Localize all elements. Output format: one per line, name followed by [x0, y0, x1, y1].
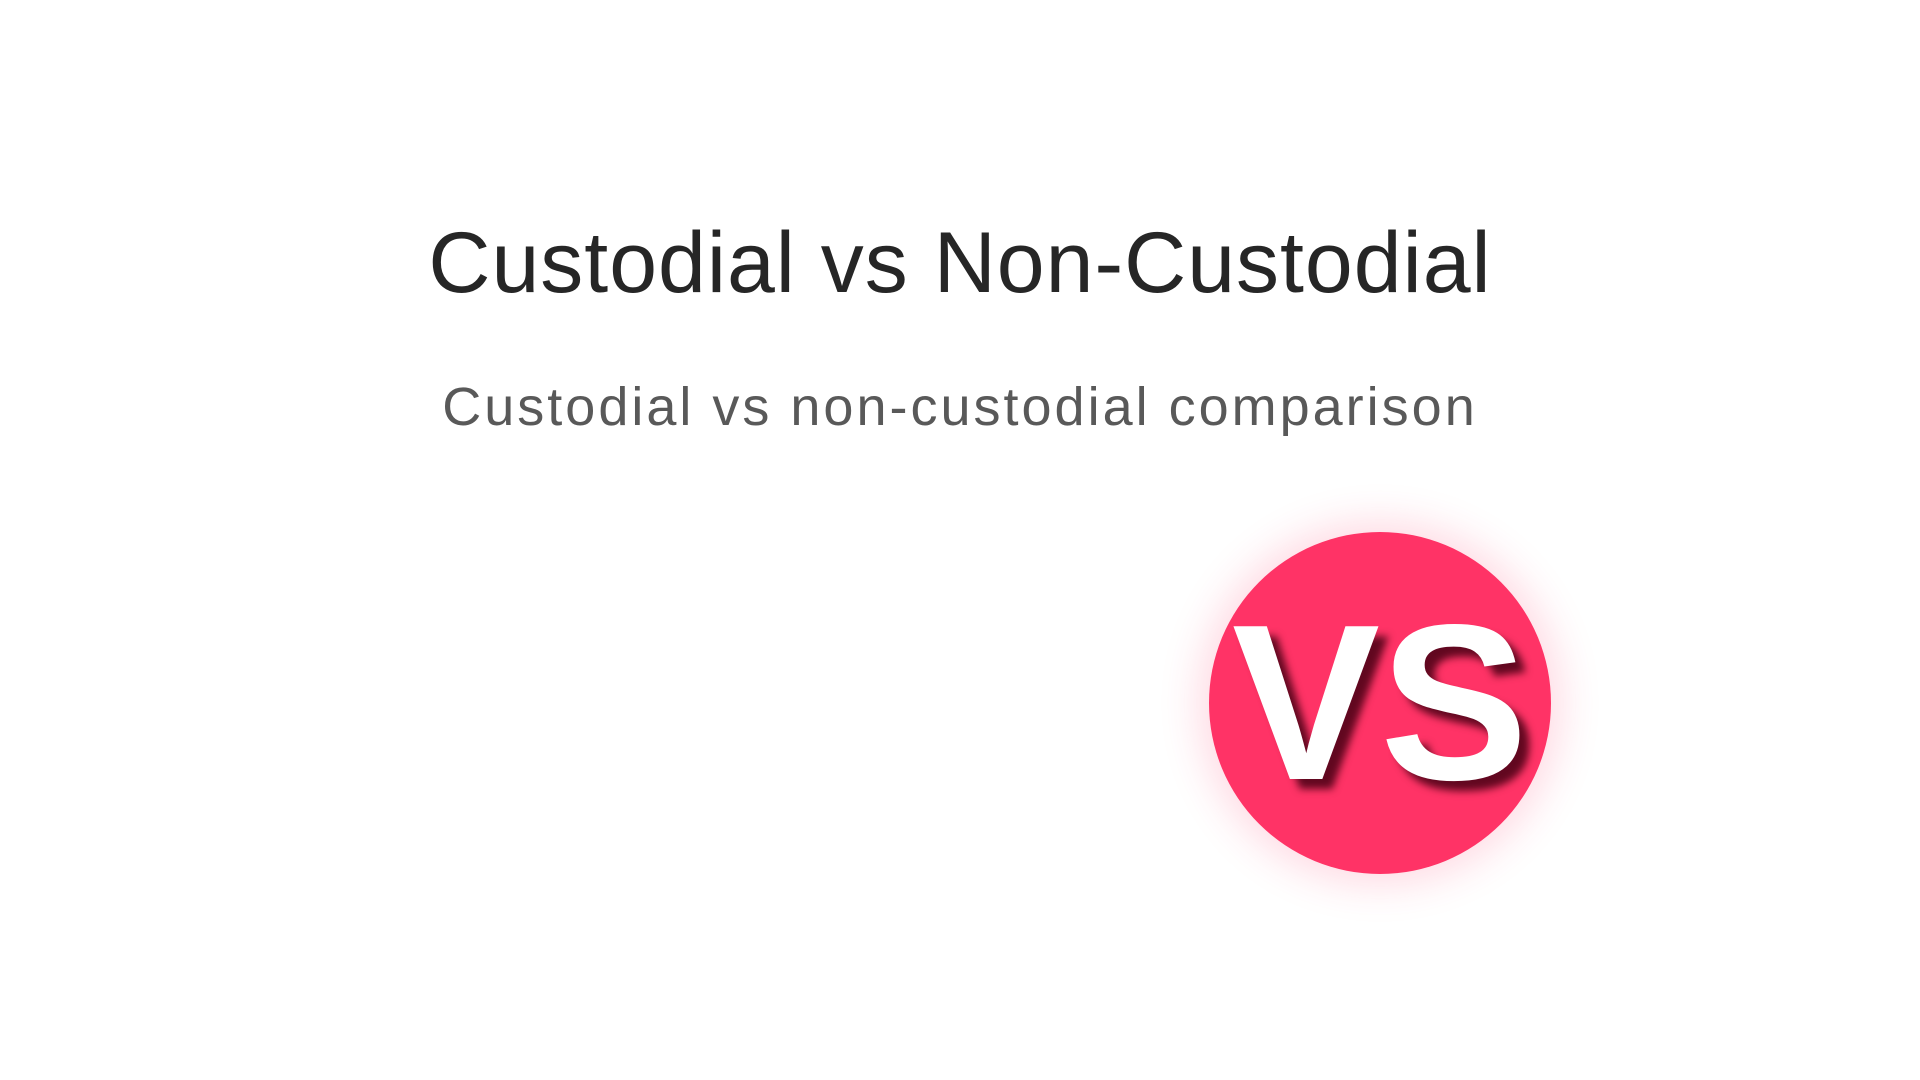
icon: VS badge	[1209, 532, 1551, 874]
title: Custodial vs Non-Custodial	[428, 215, 1492, 311]
subtitle: Custodial vs non-custodial comparison	[442, 377, 1478, 437]
icon: VS badge: VS	[1232, 579, 1528, 827]
